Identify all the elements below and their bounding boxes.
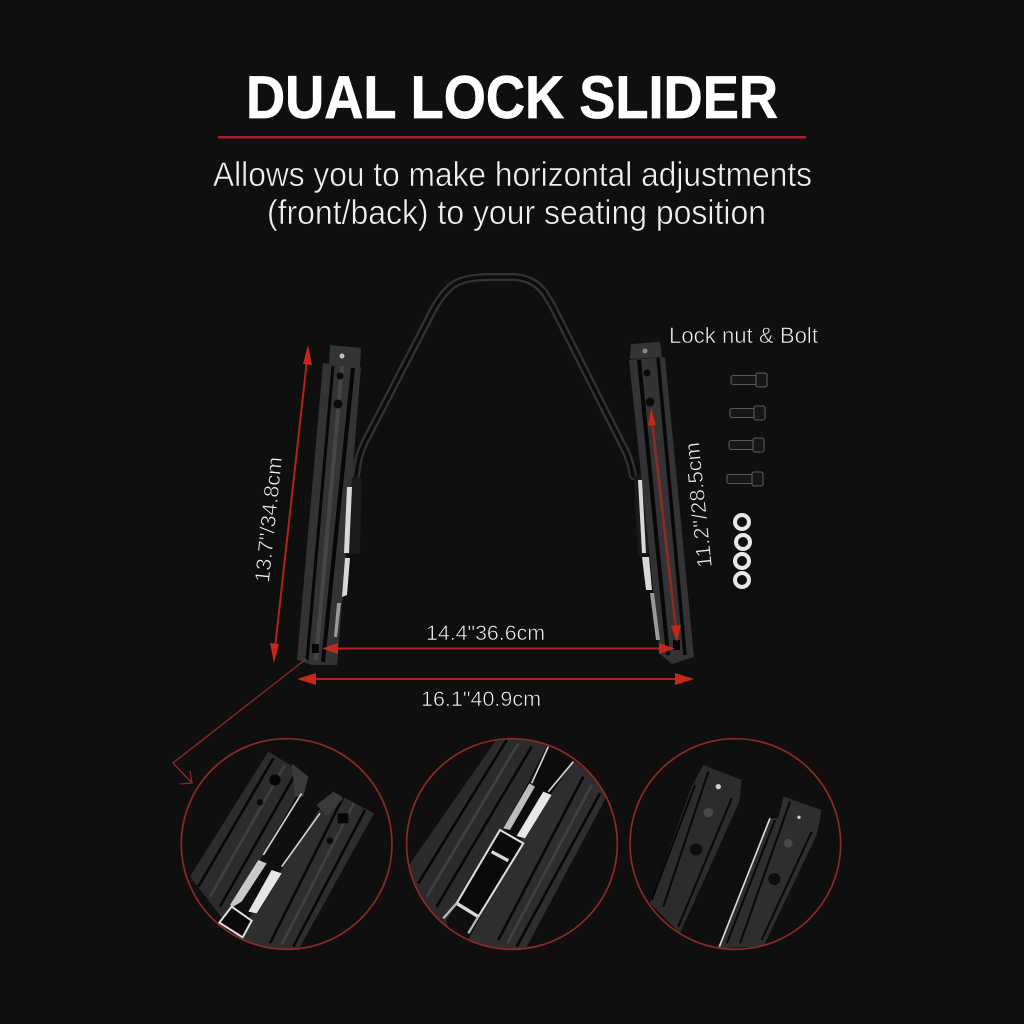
dimension arrow: 14.4 width: [322, 643, 675, 654]
subtitle: Allows you to make horizontal adjustments: [213, 156, 812, 194]
left rail silver slide: [334, 487, 352, 637]
right rail silver slide: [638, 480, 660, 640]
detail circle 3: [630, 739, 841, 949]
title underline: [218, 136, 806, 138]
left rail: [297, 345, 362, 665]
detail circle 2: [403, 737, 617, 957]
slider assembly: [297, 277, 694, 665]
dimension label: 14.4: 14.4"36.6cm: [426, 622, 545, 645]
dimension arrow: 11.2 length: [648, 408, 681, 642]
leader arrow to detail circle: [173, 659, 306, 784]
right rail: [629, 342, 694, 664]
dimension label: 13.7: 13.7"/34.8cm: [251, 456, 287, 584]
dimension arrow: 13.7 length: [270, 345, 312, 663]
detail circle 1: [181, 739, 392, 950]
icons: washers: [735, 515, 750, 587]
subtitle: (front/back) to your seating position: [267, 194, 766, 232]
dimension arrow: 16.1 width: [297, 673, 694, 685]
dimension label: 11.2: 11.2"/28.5cm: [681, 441, 717, 569]
icons: bolts: [727, 373, 767, 486]
hardware label: Lock nut & Bolt: [669, 323, 818, 348]
title: DUAL LOCK SLIDER: [246, 64, 778, 131]
dimension label: 16.1: 16.1"40.9cm: [421, 688, 541, 711]
subtitle: [213, 156, 812, 232]
connecting bar: [354, 277, 633, 488]
